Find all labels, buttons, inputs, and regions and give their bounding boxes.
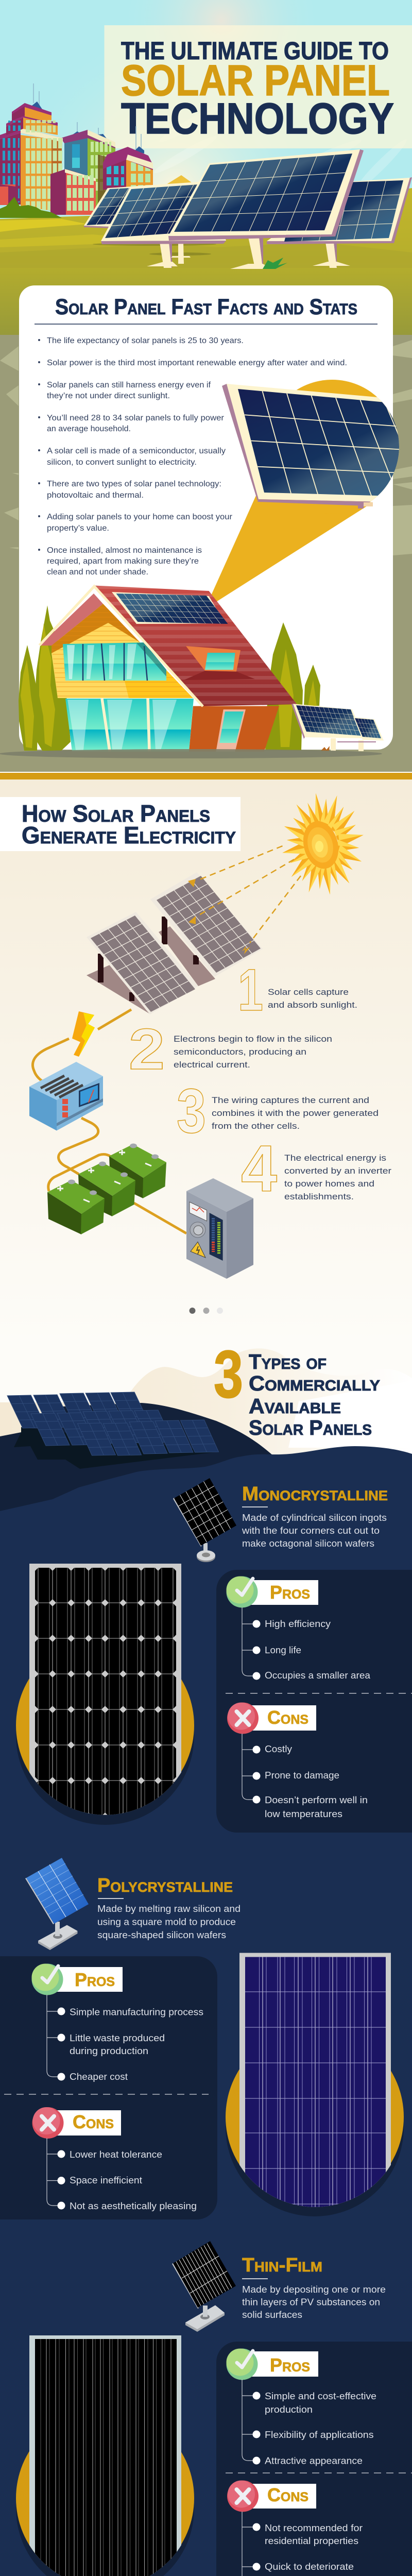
- dark hill: [0, 1403, 273, 1515]
- illustration: house with solar roof: [19, 585, 384, 751]
- description: using a square mold to produce: [97, 1917, 236, 1927]
- pros label: [227, 1577, 318, 1607]
- pros list: Simple manufacturing process: [70, 2007, 203, 2018]
- illustration: city buildings: [0, 83, 153, 215]
- door: [216, 709, 246, 751]
- facts list: [38, 336, 347, 577]
- pros list: during production: [70, 2046, 148, 2056]
- facts list: Once installed, almost no maintenance is: [47, 546, 202, 555]
- facts list: property’s value.: [47, 524, 109, 533]
- facts list: Solar panels can still harness energy even if: [47, 381, 211, 389]
- far left panel: [84, 187, 139, 228]
- illustration: bush: [0, 197, 62, 218]
- cons list: Not recommended for: [265, 2523, 363, 2533]
- trees right: [265, 622, 320, 751]
- cons list: Costly: [265, 1744, 292, 1754]
- center panel: [168, 149, 364, 241]
- side panels: [291, 704, 384, 751]
- pros list: Occupies a smaller area: [265, 1670, 371, 1681]
- cons list: Space inefficient: [70, 2175, 142, 2185]
- heading: 3 types: Commercially: [249, 1371, 380, 1395]
- panel: thin-film: [16, 2241, 412, 2576]
- pros list: Flexibility of applications: [265, 2430, 374, 2440]
- step 4: to power homes and: [284, 1179, 374, 1189]
- gable eave: [40, 594, 103, 646]
- facts list: photovoltaic and thermal.: [47, 491, 144, 500]
- type title: Thin-Film: [242, 2255, 322, 2276]
- wall: gable: [52, 604, 193, 698]
- illustration: solar field on hill: [7, 1392, 218, 1469]
- panel: polycrystalline: [0, 1858, 404, 2219]
- facts list: an average household.: [47, 425, 131, 433]
- pros list: [242, 1607, 371, 1681]
- step 1: 1: [238, 957, 263, 1023]
- heading: 3 types: Available: [249, 1394, 341, 1418]
- section: types intro hills: [0, 1345, 412, 1515]
- pros cons card: [216, 1570, 412, 1833]
- description: Made by melting raw silicon and: [97, 1904, 241, 1914]
- icon: thin-film mini panel: [172, 2241, 236, 2332]
- pros label: [227, 2348, 318, 2380]
- step 4: [241, 1132, 391, 1205]
- cons label: Cons: [73, 2111, 114, 2132]
- pros list: [242, 2379, 376, 2466]
- cons list: Prone to damage: [265, 1770, 339, 1781]
- lower glass: [65, 699, 194, 751]
- facts list: required, apart from making sure they’re: [47, 557, 199, 566]
- lower wall: [189, 706, 279, 751]
- step 1: Solar cells capture: [268, 987, 349, 997]
- icon: batteries: [47, 1144, 166, 1234]
- description: Made by depositing one or more: [242, 2284, 386, 2295]
- pros list: Simple and cost-effective: [265, 2391, 376, 2401]
- cons list: residential properties: [265, 2536, 358, 2546]
- cons list: Not as aesthetically pleasing: [70, 2201, 197, 2211]
- heading: 3 types: Solar Panels: [249, 1416, 372, 1439]
- band: [0, 773, 412, 779]
- description: with the four corners cut out to: [242, 1526, 380, 1536]
- step 3: The wiring captures the current and: [212, 1095, 369, 1105]
- navy background: [0, 1446, 412, 2576]
- step 1: and absorb sunlight.: [268, 1000, 357, 1010]
- step 3: [177, 1076, 379, 1146]
- heading: 3 types: 3: [214, 1336, 243, 1412]
- cons label: Cons: [267, 1707, 308, 1728]
- background: facts section: [0, 335, 412, 772]
- ground shadow: [0, 749, 382, 758]
- icon: charge controller: [29, 1062, 103, 1130]
- pros label: Pros: [75, 1969, 115, 1990]
- carousel dots: [190, 1308, 223, 1314]
- step 2: [129, 1017, 332, 1081]
- pros list: Long life: [265, 1645, 301, 1655]
- roof solar panel: [112, 592, 228, 624]
- cons label: [32, 2107, 121, 2139]
- step 3: combines it with the power generated: [212, 1108, 379, 1118]
- type title: Polycrystalline: [97, 1875, 233, 1896]
- pros label: Pros: [270, 1582, 310, 1603]
- step 1: [238, 957, 357, 1023]
- facts card: [19, 285, 393, 750]
- pros label: [32, 1964, 123, 1995]
- illustration: solar field: [84, 149, 412, 269]
- pros list: High efficiency: [265, 1619, 331, 1629]
- description: [242, 2284, 386, 2320]
- background: hero sky: [0, 0, 412, 258]
- cons list: Quick to deteriorate: [265, 2562, 354, 2572]
- cons list: Doesn’t perform well in: [265, 1795, 368, 1805]
- heading: Generate Electricity: [22, 822, 236, 849]
- pros list: [47, 1995, 203, 2082]
- step 3: from the other cells.: [212, 1121, 300, 1131]
- type title: Monocrystalline: [242, 1483, 388, 1505]
- step 4: converted by an inverter: [284, 1166, 391, 1176]
- step 2: Electrons begin to flow in the silicon: [174, 1034, 332, 1044]
- description: make octagonal silicon wafers: [242, 1538, 374, 1549]
- circle and thin-film panel: [16, 2335, 194, 2576]
- facts list: silicon, to convert sunlight to electricity.: [47, 458, 197, 467]
- description: [97, 1904, 241, 1940]
- cons list: [242, 1734, 368, 1819]
- title panel: [104, 25, 412, 148]
- step 2: 2: [129, 1017, 165, 1081]
- heading: [0, 797, 241, 851]
- icon: monocrystalline mini panel: [173, 1478, 236, 1562]
- illustration: magnified solar panel callout: [211, 380, 399, 602]
- icon: lightning bolt: [72, 1011, 95, 1057]
- facts list: clean and not under shade.: [47, 568, 148, 577]
- cons list: low temperatures: [265, 1809, 342, 1819]
- upper window: [63, 642, 166, 681]
- facts list: You’ll need 28 to 34 solar panels to fully power: [47, 414, 224, 422]
- solar array: [87, 872, 263, 1014]
- icon: sun: [275, 784, 371, 904]
- pros list: production: [265, 2404, 313, 2415]
- step 2: electrical current.: [174, 1060, 250, 1070]
- facts list: Solar power is the third most important renewable energy after water and wind.: [47, 359, 347, 367]
- step 4: The electrical energy is: [284, 1153, 386, 1163]
- pros list: Attractive appearance: [265, 2455, 363, 2466]
- step 2: semiconductors, producing an: [174, 1047, 306, 1057]
- description: [242, 1513, 387, 1549]
- background: ground: [0, 188, 412, 335]
- pros label: Pros: [270, 2354, 310, 2376]
- arrows: sunlight: [188, 846, 301, 954]
- cons list: Lower heat tolerance: [70, 2149, 162, 2160]
- right panel: [267, 177, 412, 244]
- heading: How Solar Panels: [22, 800, 210, 827]
- pros cons card: [216, 2342, 412, 2576]
- cons label: Cons: [267, 2484, 308, 2505]
- facts list: A solar cell is made of a semiconductor, usually: [47, 447, 226, 455]
- facts list: The life expectancy of solar panels is 25 to 30 years.: [47, 336, 244, 345]
- section: how solar panels generate electricity: [0, 779, 412, 1346]
- pros list: Cheaper cost: [70, 2072, 128, 2082]
- description: thin layers of PV substances on: [242, 2297, 380, 2307]
- pros list: Little waste produced: [70, 2033, 165, 2043]
- heading: 3 types: [214, 1336, 380, 1439]
- circle and monocrystalline panel: [16, 1564, 194, 1825]
- pros cons card: [0, 1956, 217, 2219]
- icon: polycrystalline mini panel: [25, 1858, 89, 1950]
- heading: 3 types: Types of: [249, 1350, 327, 1374]
- step 3: 3: [177, 1076, 206, 1146]
- panel posts: [147, 237, 350, 269]
- circle and polycrystalline panel: [226, 1953, 404, 2216]
- cons label: [227, 2480, 316, 2512]
- wires: [32, 1010, 186, 1233]
- left panel: [101, 181, 226, 244]
- description: solid surfaces: [242, 2310, 302, 2320]
- facts list: they’re not under direct sunlight.: [47, 392, 170, 400]
- cons list: [47, 2138, 197, 2211]
- facts heading: Solar Panel Fast Facts and Stats: [55, 295, 357, 319]
- step 4: 4: [241, 1132, 277, 1205]
- roof: [94, 585, 297, 706]
- description: square-shaped silicon wafers: [97, 1930, 226, 1940]
- icon: inverter cabinet: [186, 1178, 253, 1279]
- dormer: [184, 646, 255, 680]
- description: Made of cylindrical silicon ingots: [242, 1513, 387, 1523]
- facts list: There are two types of solar panel technology:: [47, 480, 221, 488]
- trees left: [19, 605, 71, 751]
- cons list: [242, 2512, 363, 2576]
- step 4: establishments.: [284, 1192, 354, 1201]
- facts list: Adding solar panels to your home can boost your: [47, 513, 232, 521]
- panel: monocrystalline: [16, 1478, 412, 1833]
- cons label: [227, 1702, 316, 1734]
